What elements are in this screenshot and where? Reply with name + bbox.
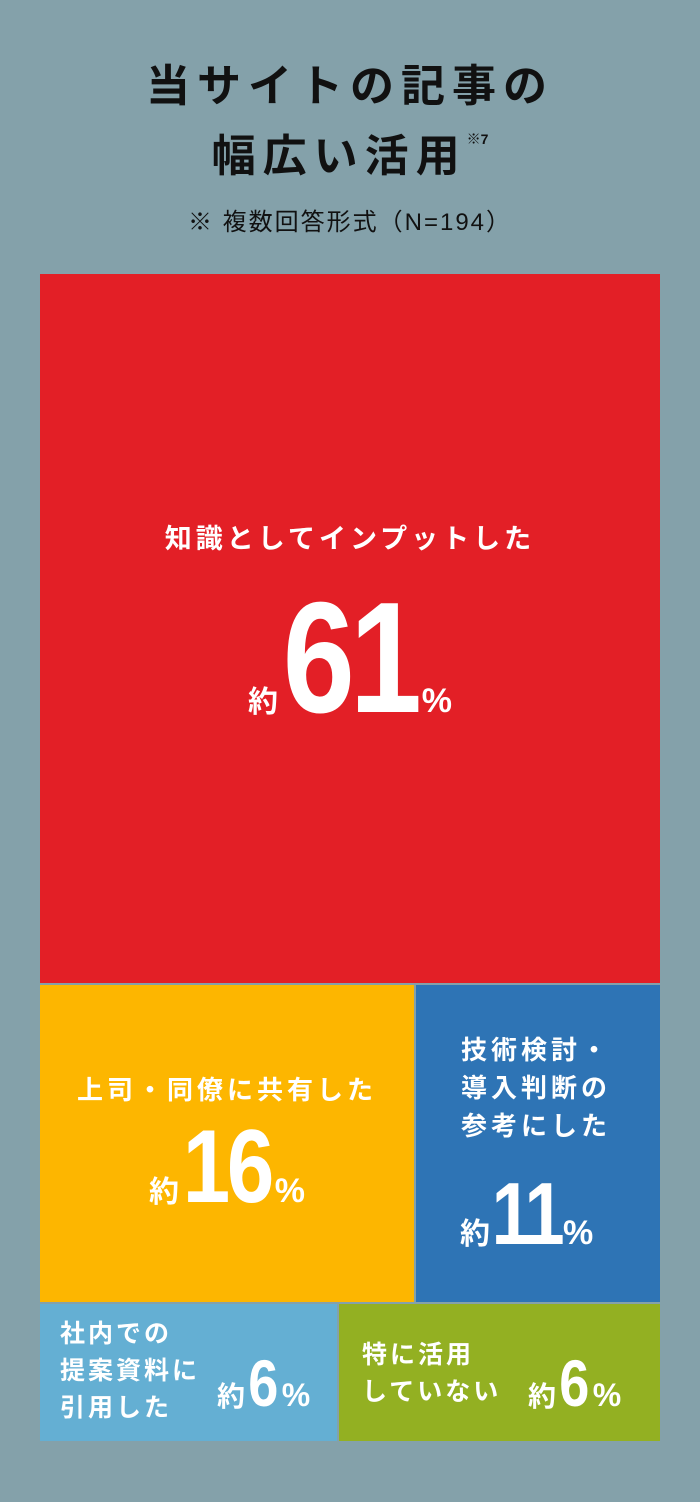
label: proposal: [60, 1320, 200, 1422]
subtitle: ※ 複数回答形式（N=194）: [188, 209, 512, 236]
value: 16%: [149, 1109, 305, 1225]
label: none: [362, 1341, 501, 1406]
value: 6% light: 6: [248, 1346, 278, 1420]
label: proposal: 引用した: [60, 1394, 172, 1422]
value: 61%: [248, 570, 452, 746]
value: 16%: 約 %: [149, 1172, 305, 1210]
label: tech: [461, 1035, 611, 1141]
label: none: していない: [362, 1378, 501, 1406]
label: none: 特に活用: [362, 1341, 474, 1369]
panel: proposal: [40, 1304, 337, 1441]
value: 11%: 約 %: [460, 1214, 593, 1252]
label: proposal: 社内での: [60, 1320, 172, 1348]
value: 16%: 16: [183, 1109, 271, 1225]
title: 当サイトの記事の: [146, 62, 554, 111]
value: 61%: 約 %: [248, 682, 452, 720]
value: 6% green: [528, 1346, 621, 1420]
title: [146, 62, 554, 181]
label: share: 上司・同僚に共有した: [77, 1075, 377, 1105]
label: tech: 参考にした: [461, 1111, 611, 1141]
value: 6% green: 約 %: [528, 1377, 621, 1413]
panel: share: [40, 985, 414, 1302]
label: proposal: 提案資料に: [60, 1357, 200, 1385]
panel: none: [339, 1304, 660, 1441]
label: input: 知識としてインプットした: [165, 524, 535, 554]
value: 11%: 11: [492, 1164, 561, 1263]
value: 6% light: [217, 1346, 310, 1420]
value: 6% green: 6: [559, 1346, 589, 1420]
value: 61%: 61: [283, 570, 417, 746]
value: 6% light: 約 %: [217, 1377, 310, 1413]
panel: input: [40, 274, 660, 983]
value: 11%: [460, 1164, 593, 1263]
label: tech: 技術検討・: [461, 1035, 611, 1065]
title: 幅広い活用※7: [212, 131, 488, 181]
label: tech: 導入判断の: [461, 1073, 611, 1103]
panel: tech: [416, 985, 660, 1302]
